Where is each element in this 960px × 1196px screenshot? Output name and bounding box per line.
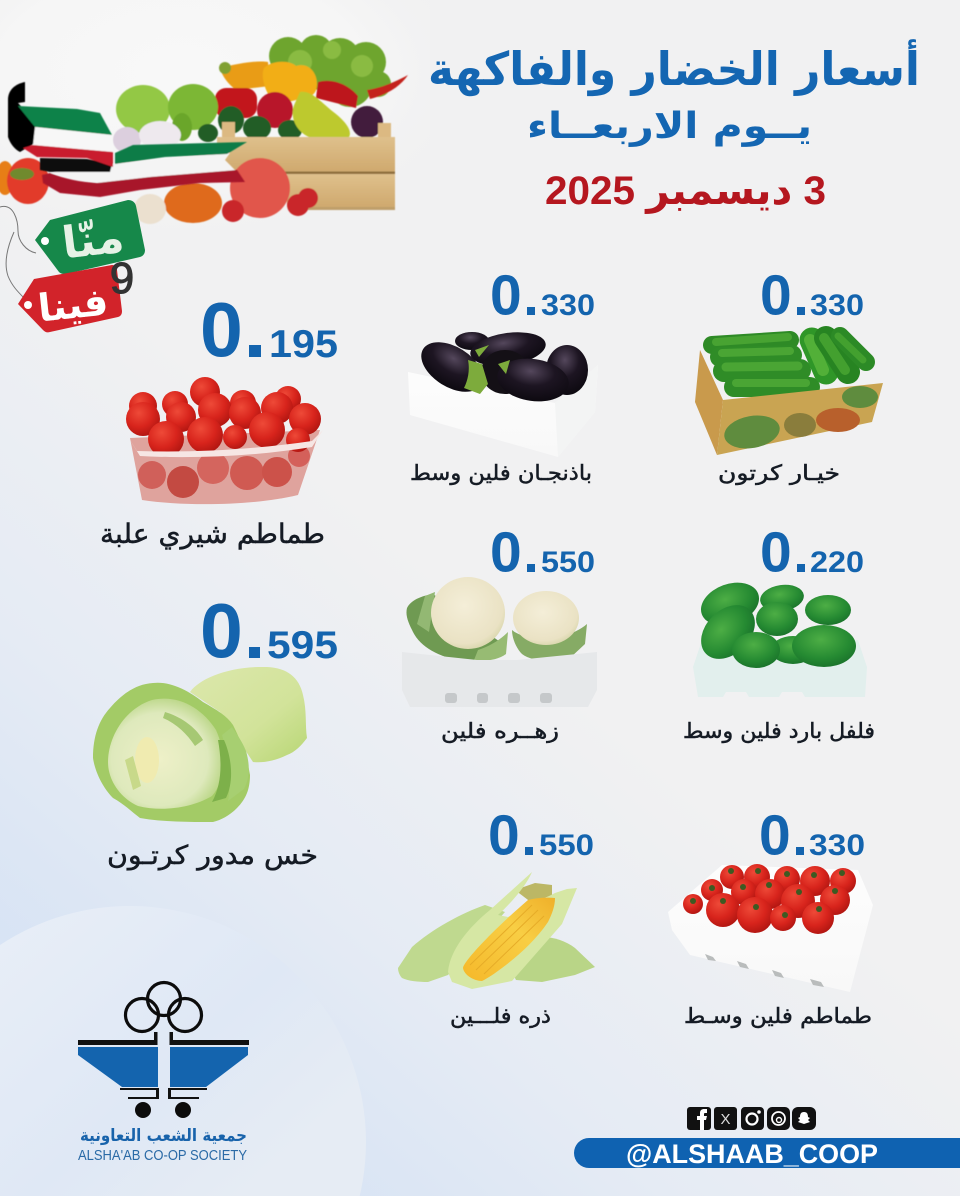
logo rings — [126, 982, 202, 1032]
green peppers — [691, 575, 856, 669]
centre husk — [448, 872, 577, 989]
name: طماطم شيري علبة — [100, 519, 325, 550]
second ribbon red — [42, 170, 245, 197]
pumpkin — [164, 183, 222, 223]
lettuce bunch — [269, 35, 391, 107]
price — [200, 288, 338, 374]
tomatoes — [683, 864, 856, 934]
flag white stripe — [33, 127, 113, 152]
cherry tomatoes — [126, 377, 321, 457]
name: ذره فلـــين — [450, 1004, 551, 1028]
price: 0 — [760, 520, 792, 584]
second ribbon green — [115, 142, 247, 164]
red bell pepper — [316, 81, 358, 108]
foam box — [668, 865, 873, 992]
icon: threads — [767, 1107, 790, 1130]
wooden crate — [217, 122, 395, 210]
name: طماطم فلين وسـط — [684, 1004, 872, 1029]
name: فلفل بارد فلين وسط — [683, 719, 875, 743]
green tag — [35, 200, 145, 274]
dark green vegetables — [198, 106, 302, 142]
large tomato — [230, 158, 290, 218]
product: cauliflower foam box — [402, 520, 597, 743]
product: tomatoes foam box — [668, 804, 873, 1029]
eggplants — [413, 328, 588, 406]
price tags — [0, 200, 145, 332]
price: 330 — [809, 829, 865, 862]
pear — [293, 92, 350, 137]
Kuwait flag ribbon — [8, 82, 247, 197]
price: 0 — [488, 804, 520, 868]
price — [488, 804, 594, 868]
red radish — [257, 92, 293, 128]
mushroom — [134, 194, 166, 224]
name: زهــره فلين — [441, 719, 559, 743]
product: bell peppers foam box — [683, 520, 875, 743]
carton — [695, 350, 883, 455]
title — [428, 39, 920, 214]
small tomatoes — [222, 188, 318, 222]
corn cob — [463, 898, 555, 981]
price: 595 — [267, 624, 338, 667]
tag string — [0, 206, 36, 300]
second ribbon white — [50, 153, 237, 183]
tomato stems — [690, 868, 845, 918]
left red pepper — [215, 88, 257, 118]
yellow and orange peppers — [219, 61, 317, 105]
green peppers — [116, 84, 218, 141]
cauliflowers — [406, 577, 587, 662]
left red pepper and orange — [0, 158, 49, 204]
logo cart base — [120, 1088, 207, 1099]
tray contents — [130, 430, 320, 504]
price — [759, 804, 865, 868]
price: 220 — [810, 546, 864, 579]
product: cucumber carton — [695, 264, 883, 485]
price — [760, 264, 864, 328]
heading: day: يــوم الاربعــاء — [527, 106, 812, 147]
name: خس مدور كرتـون — [107, 841, 318, 871]
icon: snapchat — [792, 1107, 816, 1130]
logo wheels — [135, 1102, 191, 1118]
price: 550 — [541, 546, 595, 579]
logo arabic name: جمعية الشعب التعاونية — [80, 1126, 247, 1146]
logo english name: ALSHA'AB CO-OP SOCIETY — [78, 1148, 247, 1164]
name: خيـار كرتون — [718, 461, 840, 485]
price: 0 — [490, 520, 522, 584]
price — [760, 520, 864, 584]
red chilli — [367, 75, 408, 99]
product: iceberg lettuce — [93, 588, 338, 871]
cucumbers — [712, 336, 866, 387]
tassel — [515, 883, 552, 903]
red tag: فينا — [36, 279, 110, 331]
icon: instagram — [741, 1107, 764, 1130]
price — [200, 588, 338, 674]
product: cherry tomato box — [100, 288, 338, 550]
price: 0 — [760, 264, 792, 328]
price — [490, 520, 595, 584]
flag red stripe — [23, 145, 113, 167]
icon: facebook — [687, 1107, 711, 1130]
icon: x: X — [720, 1111, 731, 1128]
garlic — [113, 121, 181, 153]
price: 330 — [541, 289, 595, 322]
price: 550 — [539, 829, 594, 862]
tray rim — [125, 430, 323, 457]
name: باذنجـان فلين وسط — [410, 461, 592, 485]
product: eggplant foam box — [408, 264, 598, 485]
price: 330 — [810, 289, 864, 322]
price: 0 — [200, 588, 243, 674]
foam tray — [693, 640, 867, 697]
connector letter: 9 — [110, 254, 134, 303]
heading: main title: أسعار الخضار والفاكهة — [428, 39, 920, 96]
red tag — [18, 265, 122, 332]
price — [490, 264, 595, 328]
heading: date: 3 ديسمبر 2025 — [545, 169, 826, 214]
flag black hoist — [8, 82, 37, 152]
handle bar: @ALSHAAB_COOP — [626, 1139, 878, 1169]
handle bar — [574, 1138, 960, 1169]
green tag: منّا — [59, 211, 127, 270]
product: corn foam — [398, 804, 595, 1028]
purple onion — [351, 106, 383, 138]
lettuce back head — [190, 667, 307, 762]
logo — [78, 982, 249, 1164]
corn kernel lines — [470, 905, 544, 974]
social icons — [687, 1107, 816, 1130]
lettuce cut head — [93, 683, 250, 822]
right husk — [512, 937, 595, 982]
produce crate illustration — [0, 35, 408, 224]
foam box — [402, 652, 597, 707]
social media handle — [574, 1107, 960, 1169]
price: 0 — [490, 264, 522, 328]
price: 195 — [269, 323, 338, 366]
flag green stripe — [18, 106, 112, 135]
foam box — [408, 365, 598, 457]
price: 0 — [759, 804, 791, 868]
flag black tail — [40, 158, 112, 172]
price: 0 — [200, 288, 243, 374]
logo cart top bar — [78, 1032, 249, 1045]
logo cart basket — [78, 1047, 248, 1087]
left husk — [398, 905, 505, 982]
